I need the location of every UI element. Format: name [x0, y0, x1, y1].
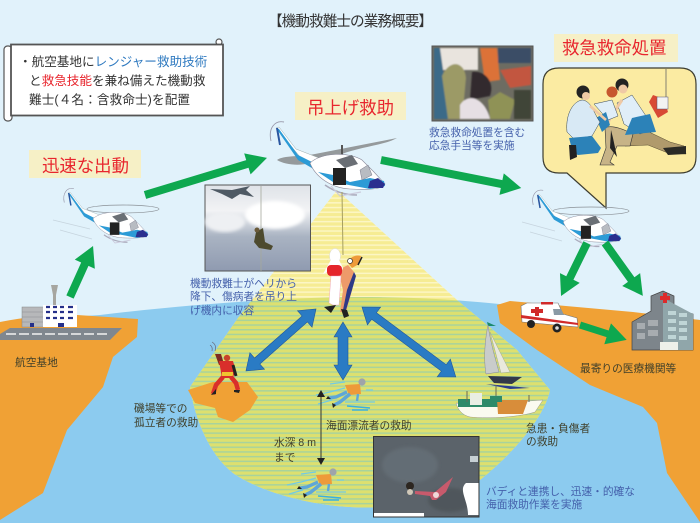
land: hospital side: [497, 301, 700, 522]
label: isolated person rescue: 孤立者の救助: [134, 416, 198, 429]
diver underwater: [287, 468, 346, 500]
label: isolated person rescue: [134, 402, 198, 429]
caption: hoist: [190, 277, 297, 317]
label: depth: 水深 8 m: [274, 437, 316, 449]
air base building: [22, 285, 77, 327]
search light area above the horizon: [190, 190, 550, 508]
depth arrow: [317, 390, 325, 465]
rescuer and casualty on hoist: [323, 248, 362, 318]
caption: hoist: げ機内に収容: [190, 304, 254, 317]
heading: quick dispatch: [29, 150, 141, 178]
heading: quick dispatch: 迅速な出動: [42, 156, 129, 176]
rescue vessel: [456, 385, 543, 418]
green arrow: ambulance to hospital: [577, 315, 630, 350]
label: depth: まで: [274, 452, 295, 464]
ambulance: [521, 302, 578, 332]
title: 【機動救難士の業務概要】: [268, 13, 433, 30]
speech bubble: [543, 68, 696, 208]
heading: emergency care: 救急救命処置: [562, 38, 666, 58]
label: medical institution: 最寄りの医療機関等: [580, 362, 677, 375]
green arrow: to hospital: [596, 237, 652, 302]
drifting person: [316, 378, 375, 410]
helicopter: dispatch: [53, 188, 159, 243]
label: drifting person rescue: 海面漂流者の救助: [326, 419, 412, 432]
blue double arrow: vessel: [355, 298, 462, 386]
land: air base: [0, 315, 138, 520]
caption: treatment: 救急救命処置を含む: [429, 126, 525, 139]
helicopter: hoisting: [270, 122, 397, 196]
callout text: と救急技能を兼ね備えた機動救: [29, 73, 206, 88]
photo: sea rescue: [374, 436, 479, 517]
caption: hoist: 降下、傷病者を吊り上: [190, 290, 297, 303]
helicopter: transport: [522, 190, 629, 247]
callout scroll: [4, 39, 223, 121]
green arrow: dispatch to hoist: [142, 147, 270, 206]
label: air base: 航空基地: [15, 356, 58, 369]
caption: sea rescue: [486, 485, 635, 511]
caption: sea rescue: 海面救助作業を実施: [486, 498, 583, 511]
label: patient rescue: の救助: [526, 435, 558, 448]
heading: hoist rescue: [295, 92, 406, 120]
search light area on the sea: [190, 297, 550, 508]
label: patient rescue: 急患・負傷者: [526, 422, 590, 435]
hoist rope: [342, 192, 343, 255]
label: patient rescue: [526, 422, 590, 448]
island: [188, 382, 258, 422]
sailboat: [485, 322, 530, 389]
hospital: [632, 291, 693, 350]
green arrow: to ambulance: [551, 238, 597, 301]
illustration: medics treating patient: [567, 69, 686, 165]
caption: hoist: 機動救難士がヘリから: [190, 277, 297, 290]
heading: emergency care: [554, 34, 678, 62]
green arrow: base to helicopter: [60, 241, 103, 302]
callout text: 難士(４名：含救命士)を配置: [29, 92, 190, 107]
callout text: [19, 54, 208, 107]
stranded person on rocks: [210, 342, 240, 395]
caption: treatment: [429, 126, 525, 152]
green arrow: hoist to transport: [379, 149, 523, 199]
callout text: ・航空基地にレンジャー救助技術: [19, 54, 208, 69]
caption: sea rescue: バディと連携し、迅速・的確な: [486, 485, 635, 498]
sea: [0, 297, 700, 523]
blue double arrow: island: [239, 301, 323, 379]
photo: hoist: [205, 185, 310, 271]
caption: treatment: 応急手当等を実施: [429, 139, 515, 152]
photo: on-board treatment: [432, 46, 533, 121]
label: depth: [274, 437, 316, 464]
heading: hoist rescue: 吊上げ救助: [307, 98, 394, 118]
label: isolated person rescue: 磯場等での: [134, 402, 187, 415]
blue double arrow: drifting person: [334, 322, 352, 380]
runway: [0, 328, 122, 340]
